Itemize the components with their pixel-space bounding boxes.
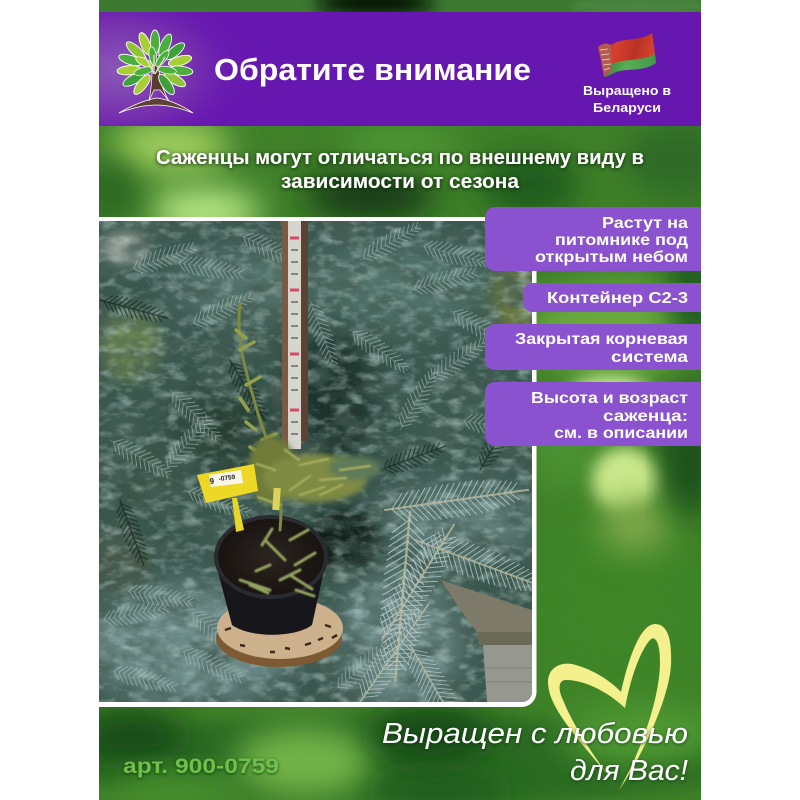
- blurred green background: [99, 0, 701, 800]
- label: grown in Belarus: [583, 84, 671, 115]
- feature pill: closed root system: [485, 324, 701, 370]
- feature pill: height and age: саженца:: [603, 408, 688, 425]
- spruce sprigs: [98, 217, 530, 697]
- slogan: для Вас!: [570, 755, 688, 787]
- subtitle: [156, 147, 644, 193]
- label: grown in Belarus: Беларуси: [593, 101, 661, 115]
- page content: [99, 0, 701, 800]
- white photo frame: [99, 217, 536, 707]
- feature pill: grown outdoors: открытым небом: [535, 249, 688, 266]
- subtitle: Саженцы могут отличаться по внешнему виду в: [156, 147, 644, 169]
- black plant pot: [214, 515, 328, 635]
- needle texture: [99, 221, 532, 702]
- large branches bottom right: [359, 480, 532, 702]
- logo: tree: [117, 30, 193, 113]
- wooden boards: [441, 580, 532, 702]
- feature pill: height and age: [485, 382, 701, 446]
- photo: plant in pot among spruce branches: [99, 221, 532, 702]
- feature pill: grown outdoors: питомнике под: [555, 232, 688, 249]
- feature pill: container: [523, 283, 701, 312]
- feature pill: grown outdoors: [485, 207, 701, 271]
- feature pill: closed root system: Закрытая корневая: [515, 331, 688, 348]
- yellow plant tag: -0759: [218, 474, 236, 483]
- label: grown in Belarus: Выращено в: [583, 84, 671, 98]
- infographic page: [99, 0, 701, 800]
- icon: yellow heart: [548, 624, 671, 790]
- feature pill: closed root system: система: [611, 349, 688, 366]
- subtitle: зависимости от сезона: [281, 171, 520, 193]
- cork base: [216, 597, 343, 667]
- feature pill: height and age: Высота и возраст: [531, 390, 688, 407]
- article number: арт. 900-0759: [123, 755, 279, 778]
- header band: [99, 12, 701, 126]
- title: Обратите внимание: [214, 52, 531, 87]
- dark needle shadows: [99, 221, 532, 702]
- icon: Belarus flag: [598, 33, 656, 77]
- yellow plant tag: [197, 464, 281, 532]
- feature pill: height and age: см. в описании: [554, 425, 688, 442]
- yellow plant tag: 9: [209, 476, 215, 486]
- vertical measuring ruler: [282, 221, 308, 449]
- juniper plant: [236, 305, 381, 596]
- feature pill: grown outdoors: Растут на: [602, 215, 688, 232]
- slogan: [382, 721, 689, 782]
- slogan: Выращен с любовью: [382, 718, 688, 750]
- feature pill: container: Контейнер С2-3: [547, 290, 688, 307]
